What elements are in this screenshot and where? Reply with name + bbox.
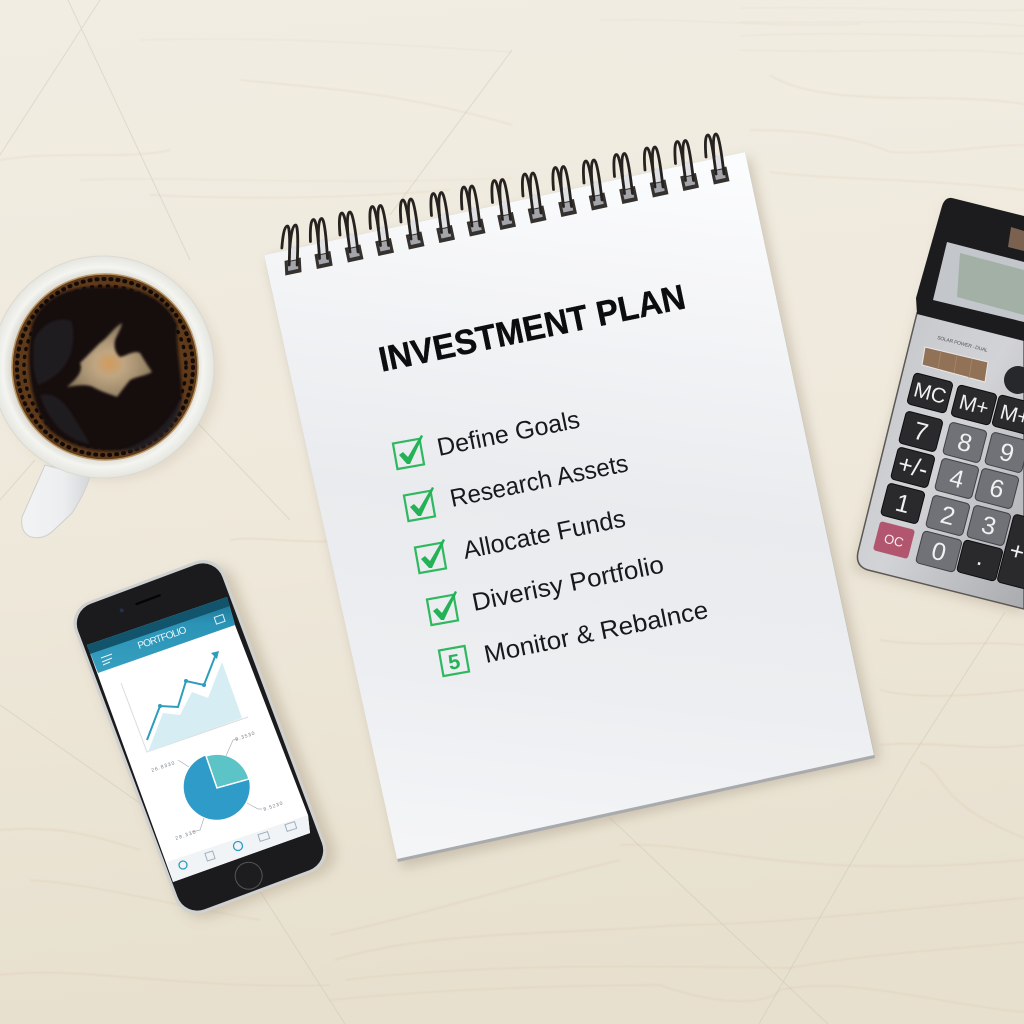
item 4 text: Diverisy Portfolio: [470, 551, 666, 617]
page stack edge: [264, 152, 875, 862]
cup handle: [22, 465, 90, 538]
item 1 text: Define Goals: [435, 406, 582, 462]
calculator keys: M+: [957, 391, 991, 420]
LCD: [957, 253, 1024, 315]
item 3 text: Allocate Funds: [461, 505, 628, 565]
bottom navigation: [167, 815, 310, 882]
calculator top: [916, 198, 1024, 341]
pie labels: 8.5230: [263, 801, 284, 813]
solar panel: [922, 347, 988, 382]
calculator keys: 8: [955, 428, 975, 458]
pie labels: 26.8330: [151, 760, 176, 774]
calculator keys: 4: [947, 464, 967, 494]
header action icon: [214, 615, 225, 624]
cup shadow: [1, 264, 219, 480]
item 5 checkbox: 5: [447, 650, 462, 675]
coffee surface: [29, 287, 182, 451]
status bar: [87, 597, 230, 654]
item 5 checkbox: [439, 646, 469, 676]
notebook page: [264, 152, 874, 859]
header title: PORTFOLIO: [136, 625, 188, 652]
phone body: [67, 553, 333, 921]
calculator: [852, 198, 1024, 614]
phone screen: [87, 597, 310, 882]
calculator keys: 6: [987, 474, 1007, 504]
pie labels: 8.3530: [235, 731, 256, 743]
item 2 text: Research Assets: [448, 449, 631, 513]
phone shadow: [73, 558, 342, 925]
bubbles: [17, 279, 193, 455]
calculator keys: MC: [911, 378, 949, 409]
display frame: [933, 242, 1024, 322]
item 5 text: Monitor & Rebalnce: [482, 596, 711, 669]
calculator keys: 2: [938, 501, 958, 531]
calculator keys: 1: [893, 489, 913, 519]
calculator keys: 9: [997, 438, 1017, 468]
line chart: [121, 651, 248, 752]
top solar strip: [1008, 227, 1024, 251]
crema ring: [12, 274, 198, 460]
pie chart: [184, 754, 250, 820]
tiny print above solar panel: SOLAR POWER - DUAL: [936, 335, 989, 354]
notebook: [264, 134, 880, 868]
coffee cup: [0, 256, 219, 538]
checklist: [393, 406, 711, 676]
notebook shadow: [268, 158, 880, 868]
pie labels: 28.330: [175, 829, 197, 842]
smartphone: [67, 553, 342, 925]
calculator keys: 7: [911, 417, 931, 447]
item 1 checkbox: [393, 435, 424, 469]
item 4 checkbox: [427, 591, 458, 625]
calculator shadow: [852, 204, 1024, 614]
title: INVESTMENT PLAN: [375, 278, 689, 380]
calculator body: [857, 313, 1024, 609]
pie labels: [151, 731, 284, 842]
app header: [87, 597, 235, 673]
menu icon: [101, 654, 112, 665]
cup rim: [0, 256, 214, 478]
coffee reflections: [33, 319, 181, 452]
spiral binding: [277, 134, 729, 275]
item 3 checkbox: [415, 539, 446, 573]
calculator keys: +/-: [895, 450, 931, 484]
round button: [1004, 366, 1024, 394]
calculator keys: .: [974, 543, 988, 572]
calculator keys: [873, 373, 1024, 591]
calculator keys: OC: [883, 531, 905, 550]
item 2 checkbox: [404, 487, 435, 521]
calculator keys: 0: [929, 537, 949, 567]
calculator keys: 3: [979, 511, 999, 541]
crema centre: [67, 323, 152, 397]
